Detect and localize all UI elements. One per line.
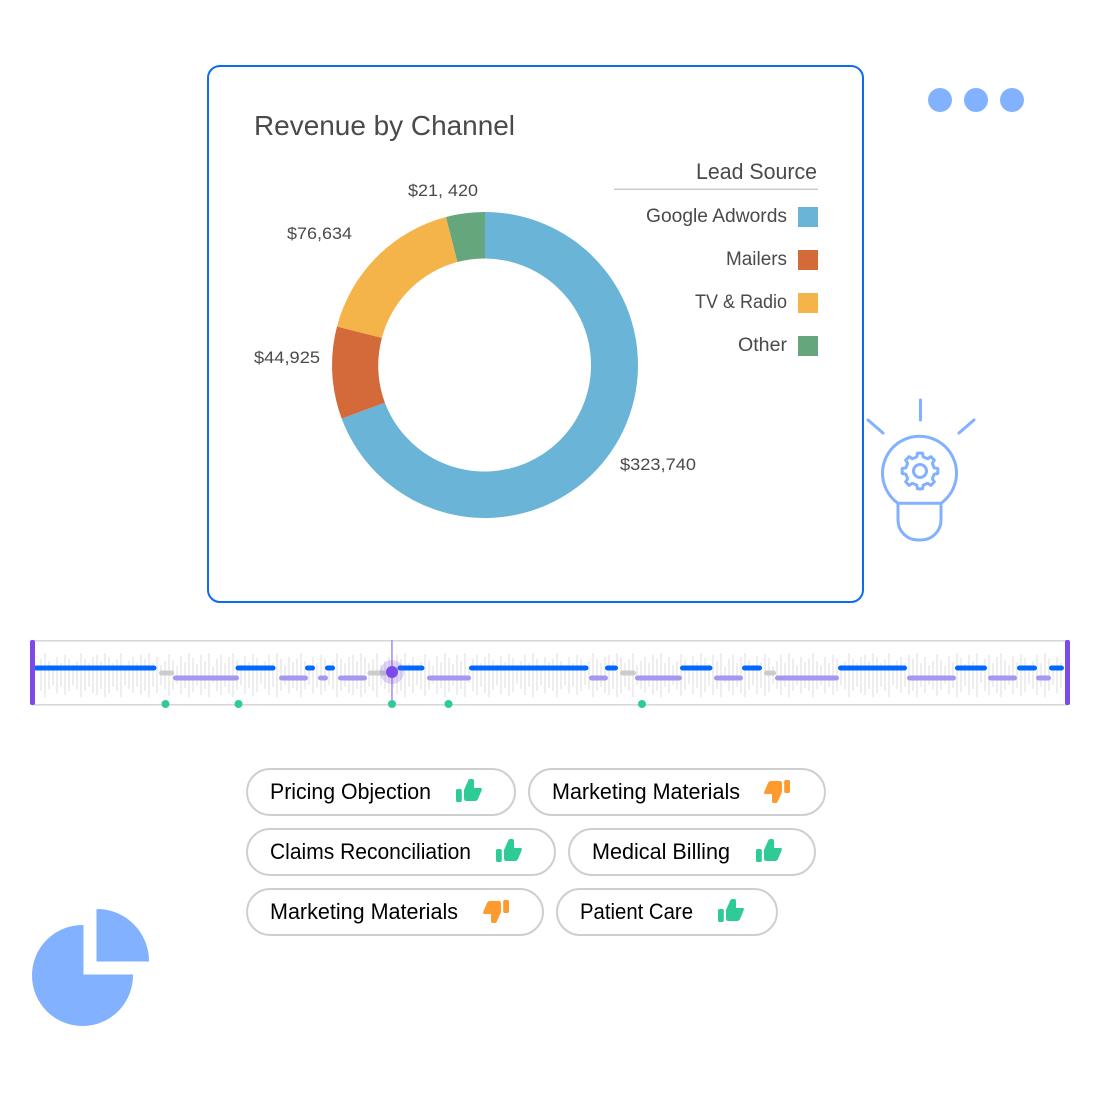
blue speaker track	[36, 666, 1062, 670]
segment: Mailers	[332, 326, 385, 419]
icon: pie chart	[33, 910, 149, 1025]
gray speaker track	[162, 670, 774, 676]
pill: Pricing Objection	[247, 769, 515, 815]
waveform	[41, 653, 1061, 697]
legend item: Other: Other	[738, 335, 788, 356]
data labels: $76,634	[287, 224, 352, 243]
pill: Pricing Objection: Pricing Objection	[270, 779, 431, 804]
icon: light bulb with gear	[868, 400, 974, 540]
playhead	[380, 640, 404, 700]
donut chart	[332, 212, 638, 518]
legend item: Google Adwords: Google Adwords	[646, 206, 787, 227]
data labels: $44,925	[254, 348, 320, 367]
range handles	[30, 640, 1070, 705]
purple speaker track	[176, 676, 1048, 680]
legend item: TV and Radio: TV & Radio	[695, 292, 787, 313]
timeline frame	[32, 641, 1068, 705]
legend heading: Lead Source	[696, 159, 817, 184]
topic pills	[247, 769, 825, 935]
pill: Medical Billing: Medical Billing	[592, 839, 730, 864]
segment: Other	[446, 212, 485, 262]
panel frame	[208, 66, 863, 602]
pill: Marketing Materials, negative: Marketing Materials	[552, 779, 740, 804]
pill: Marketing Materials, lower: Marketing Materials	[270, 899, 458, 924]
pill: Claims Reconciliation	[247, 829, 555, 875]
panel: revenue by channel	[208, 66, 863, 602]
pill: Marketing Materials, negative	[529, 769, 825, 815]
data labels: $323,740	[620, 455, 696, 474]
segment: Google Adwords	[342, 212, 638, 518]
pill: Medical Billing	[569, 829, 815, 875]
segment: TV and Radio	[337, 217, 457, 338]
pill: Marketing Materials, lower	[247, 889, 543, 935]
pill: Patient Care	[557, 889, 777, 935]
data labels	[254, 181, 696, 474]
decorative dots	[928, 88, 1024, 112]
timeline	[30, 640, 1070, 708]
data labels: $21, 420	[408, 181, 478, 200]
pill: Patient Care: Patient Care	[580, 899, 693, 924]
event markers	[162, 700, 646, 708]
legend	[614, 159, 818, 356]
legend item: Other	[738, 335, 818, 356]
title: Revenue by Channel	[254, 110, 515, 141]
legend item: Mailers	[726, 249, 818, 270]
pill: Claims Reconciliation: Claims Reconciliation	[270, 839, 471, 864]
legend item: Mailers: Mailers	[726, 249, 787, 270]
